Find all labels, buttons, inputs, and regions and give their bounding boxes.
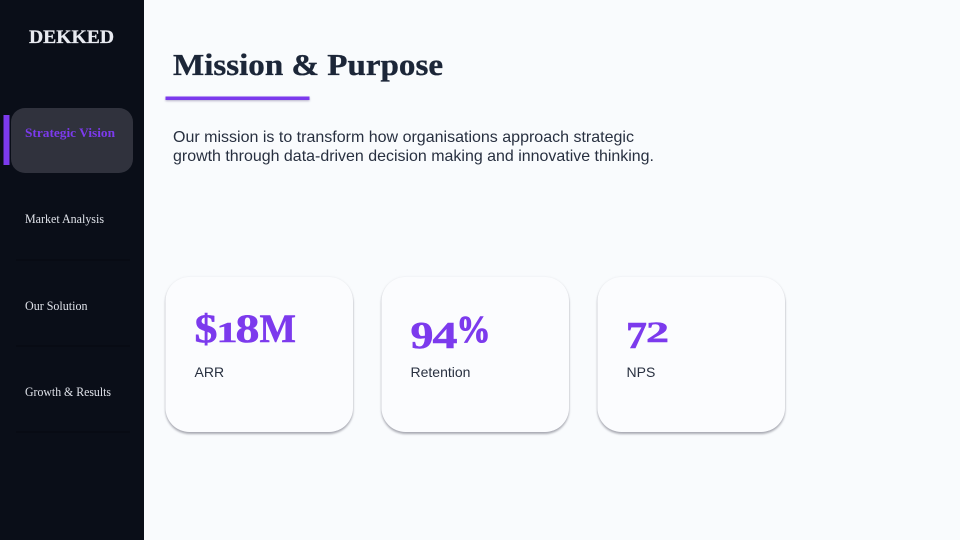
card: ARR bbox=[166, 277, 353, 432]
title: Mission & Purpose bbox=[173, 47, 443, 82]
card: NPS bbox=[598, 277, 785, 432]
metric label: Retention bbox=[410, 364, 470, 380]
title underline bbox=[166, 96, 310, 100]
metric value: 9 bbox=[410, 315, 434, 357]
nav item: Strategic Vision (active) bbox=[4, 108, 133, 173]
metric value: 7 bbox=[626, 315, 647, 357]
nav item: Our Solution: Our Solution bbox=[25, 299, 88, 313]
metric value: 1 bbox=[216, 318, 238, 349]
metric value: 2 bbox=[646, 316, 669, 349]
metric value: % bbox=[456, 309, 490, 351]
logo: DEKKED: DEKKED bbox=[29, 27, 114, 48]
nav item: Market Analysis bbox=[16, 212, 130, 260]
metric value: M bbox=[260, 306, 296, 351]
mission statement: Our mission is to transform how organisations approach strategic bbox=[173, 129, 634, 146]
nav item: Growth & Results: Growth & Results bbox=[25, 385, 111, 399]
metric label: ARR bbox=[194, 364, 224, 380]
card: Retention bbox=[382, 277, 569, 432]
nav item: Growth & Results bbox=[16, 385, 130, 432]
metric label: NPS bbox=[626, 364, 655, 380]
metric value: 4 bbox=[432, 315, 458, 357]
mission statement: growth through data-driven decision making and innovative thinking. bbox=[173, 148, 654, 165]
nav item: Strategic Vision (active): Strategic Vision bbox=[25, 126, 115, 140]
nav item: Market Analysis: Market Analysis bbox=[25, 212, 104, 226]
sidebar bbox=[0, 0, 144, 540]
metric value: 8 bbox=[236, 306, 260, 351]
nav item: Our Solution bbox=[16, 299, 130, 346]
metric value: $ bbox=[194, 306, 218, 351]
mission statement bbox=[173, 129, 654, 165]
